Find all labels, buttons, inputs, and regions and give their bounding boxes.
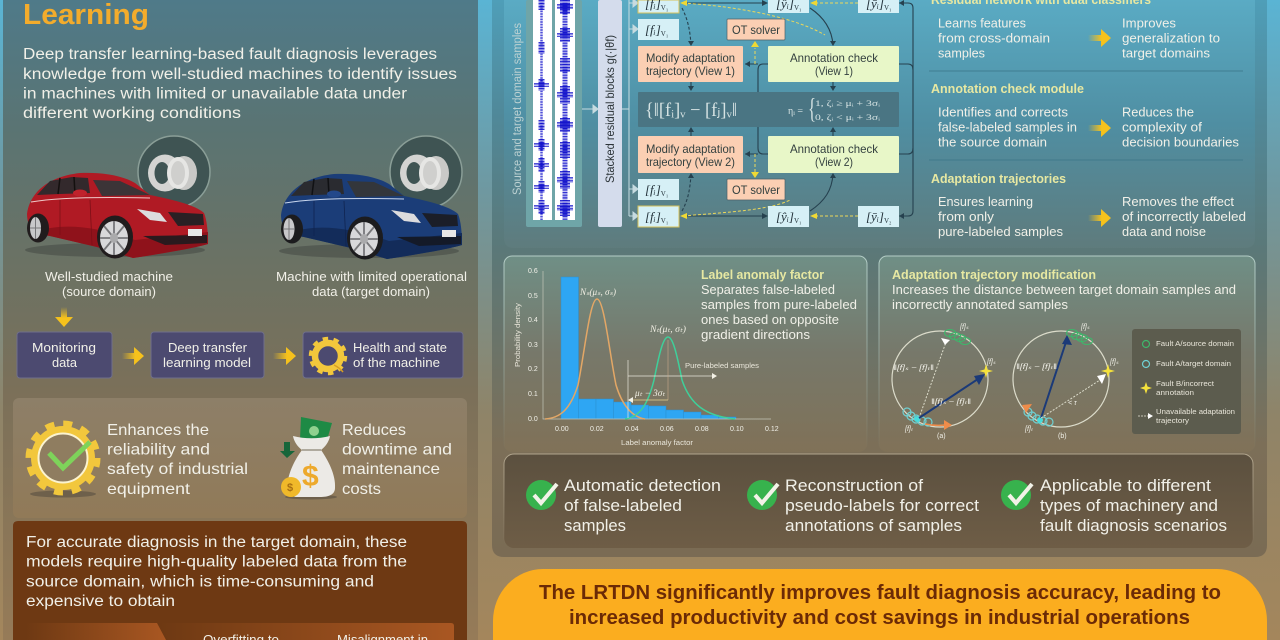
icon: red car: [25, 173, 208, 258]
formula band: 1, ζᵢ ≥ μᵢ + 3σᵢ: [815, 98, 881, 108]
text: reduces downtime: Reduces: [342, 422, 406, 439]
block: annotation check module: Reduces the: [1122, 104, 1194, 120]
feature: applicable: types of machinery and: [1040, 497, 1218, 515]
chart: probability density histogram: 0.10: [730, 426, 744, 433]
diagram: circle b: (b): [1058, 433, 1067, 440]
icon: gear with check: [30, 424, 96, 498]
conclusion banner: increased productivity and cost savings in industrial operations: [569, 607, 1190, 629]
box: deep transfer learning model: [151, 332, 264, 378]
text: labeled data requirement: expensive to obtain: [26, 593, 175, 610]
intro paragraph: in machines with limited or unavailable data under: [23, 86, 407, 102]
diagram: circle a: [892, 324, 996, 440]
feature: reconstruction: pseudo-labels for correct: [785, 497, 979, 515]
box: deep transfer learning model: Deep transfer: [168, 340, 248, 355]
formula band: {: [808, 94, 816, 125]
text: enhances reliability: [107, 422, 248, 498]
feature box labels: V₁: [661, 30, 668, 38]
box: health and state of the machine: of the machine: [353, 355, 440, 370]
feature: reconstruction: Reconstruction of: [785, 477, 923, 495]
feature box labels: V₁: [661, 217, 668, 225]
block: adaptation trajectories: Adaptation trajectories: [931, 171, 1066, 186]
feature box labels: [ŷᵢ]: [776, 209, 794, 224]
block: adaptation trajectories: of incorrectly labeled: [1122, 209, 1246, 224]
conclusion banner: The LRTDN significantly improves fault diagnosis accuracy, leading to: [539, 582, 1221, 604]
stacked residual blocks: Stacked residual blocks g(·|θf): [603, 35, 617, 183]
text: label anomaly factor: gradient directions: [701, 327, 811, 342]
annotation check boxes: [768, 46, 899, 173]
feature box labels: V₁: [661, 190, 668, 198]
feature box labels: V₁: [794, 4, 801, 12]
chart: probability density histogram: 0.02: [590, 426, 604, 433]
diagram: circle a: ‖[f]ₛ − [f]ₜ‖: [893, 365, 934, 372]
chart: probability density histogram: 0.3: [528, 342, 538, 349]
text: trajectory modification: incorrectly annotated samples: [892, 297, 1069, 312]
chart: probability density histogram: Pure-labeled samples: [685, 361, 759, 370]
feature box labels: [fᵢ]: [645, 209, 661, 224]
icon: gear: [311, 339, 345, 373]
icon: bearing on target machine: [390, 136, 462, 208]
block: adaptation trajectories: Removes the effect: [1122, 194, 1234, 209]
diagram: circle b: [1013, 324, 1119, 440]
feature box labels: V₂: [884, 217, 892, 225]
legend: Fault B/incorrect: [1156, 379, 1215, 388]
modify adaptation trajectory boxes: Modify adaptation: [646, 142, 735, 156]
yellow dashed connectors: [683, 3, 858, 216]
OT solver boxes: OT solver: [732, 23, 780, 37]
arrow: down to monitoring data: [55, 307, 73, 327]
annotation check boxes: Annotation check: [790, 142, 879, 156]
intro paragraph: different working conditions: [23, 105, 241, 122]
block: annotation check module: the source domain: [938, 134, 1047, 150]
chart: probability density histogram: Label anomaly factor: [621, 440, 694, 447]
OT solver boxes: [727, 19, 785, 200]
diagram: circle a: [f]ₜ: [904, 426, 914, 433]
intro paragraph: [23, 46, 457, 122]
diagram: circle a: [f]ₛ: [986, 359, 996, 366]
arrow: to health state: [273, 347, 296, 365]
feature: reconstruction: [747, 477, 979, 535]
right panel: LRTDN: [492, 0, 1267, 557]
source machine label: (source domain): [62, 285, 156, 299]
vertical label: samples: Source and target domain samples: [512, 23, 524, 195]
panel: data requirement: [13, 521, 467, 640]
signals: [526, 0, 582, 227]
text: label anomaly factor: Label anomaly factor: [701, 267, 824, 282]
source machine label: Well-studied machine: [45, 270, 173, 284]
target machine label: Machine with limited operational: [276, 270, 467, 284]
box: monitoring data: data: [52, 355, 78, 370]
block: adaptation trajectories: from only: [938, 209, 995, 224]
text: reduces downtime: costs: [342, 481, 381, 498]
chart: probability density histogram: 0.5: [528, 293, 538, 300]
feature: applicable: [1001, 477, 1227, 535]
annotation check boxes: (View 1): [815, 64, 853, 78]
text: enhances reliability: equipment: [107, 481, 191, 498]
block: annotation check module: Annotation check module: [931, 81, 1084, 96]
chart: probability density histogram: Probability density: [515, 302, 522, 367]
chart: probability density histogram: 0.00: [555, 426, 569, 433]
modify adaptation trajectory boxes: trajectory (View 1): [646, 64, 735, 78]
feature box labels: [fᵢ]: [645, 22, 661, 37]
chart: probability density histogram: 0.6: [528, 268, 538, 275]
box: monitoring data: Monitoring: [32, 340, 96, 355]
panel: benefits: [13, 398, 467, 518]
block: annotation check module: false-labeled samples in: [938, 120, 1077, 134]
box: health and state of the machine: Health and state: [353, 340, 447, 355]
feature: automatic detection: Automatic detection: [564, 477, 721, 495]
feature box labels: V₁: [794, 217, 801, 225]
chart: probability density histogram: 0.1: [528, 391, 538, 398]
diagram: circle a: ‖[f]ₛ − [f]ₜ‖: [931, 399, 971, 406]
legend: Unavailable adaptation: [1156, 407, 1235, 416]
legend: [1132, 329, 1241, 434]
diagram: network architecture: [512, 0, 913, 227]
block: annotation check module: complexity of: [1122, 120, 1202, 134]
intro paragraph: Deep transfer learning-based fault diagnosis leverages: [23, 46, 437, 63]
modify adaptation trajectory boxes: trajectory (View 2): [646, 155, 735, 169]
panel: adaptation trajectory modification: [879, 256, 1255, 452]
diagram: circle a: [f]ₛ: [959, 324, 969, 331]
chart: probability density histogram: 0.08: [695, 426, 709, 433]
block: residual network: Learns features: [938, 16, 1026, 30]
text: reduces downtime: [342, 422, 452, 498]
chart: probability density histogram: Nₛ(μₛ, σₛ): [579, 287, 616, 297]
icon: money bag: $: [287, 482, 293, 494]
icon: bearing on source machine: [138, 136, 210, 208]
block: residual network: samples: [938, 46, 985, 60]
diagram: circle b: ‖[f]ₛ − [f]ₜ‖: [1016, 364, 1057, 371]
block: residual network: generalization to: [1122, 30, 1220, 46]
icon: money bag: $: [302, 460, 319, 493]
formula band: {‖[fᵢ]ᵥ − [fⱼ]ᵥ‖: [645, 100, 737, 121]
chart: probability density histogram: [515, 268, 779, 447]
text: label anomaly factor: samples from pure-labeled: [701, 297, 857, 312]
feature: applicable: fault diagnosis scenarios: [1040, 517, 1227, 535]
block: annotation check module: Identifies and corrects: [938, 104, 1068, 120]
legend: Fault A/source domain: [1156, 339, 1234, 348]
yellow arrowheads: [680, 0, 817, 219]
text: label anomaly factor: Separates false-labeled: [701, 282, 835, 297]
left panel: problem context: [3, 0, 478, 640]
modify adaptation trajectory boxes: [638, 46, 743, 173]
block: residual network: from cross-domain: [938, 30, 1050, 46]
panel: label anomaly factor: [504, 256, 867, 452]
block: residual network: Improves: [1122, 16, 1176, 30]
text: label anomaly factor: ones based on opposite: [701, 312, 839, 327]
panel: key features: [504, 454, 1253, 548]
chart: probability density histogram: 0.12: [765, 426, 779, 433]
legend: trajectory: [1156, 416, 1189, 425]
text: labeled data requirement: models require high-quality labeled data from the: [26, 554, 407, 570]
chart: probability density histogram: 0.4: [528, 317, 538, 324]
target machine label: data (target domain): [312, 285, 430, 299]
modify adaptation trajectory boxes: Modify adaptation: [646, 51, 735, 65]
chart: probability density histogram: 0.2: [528, 366, 538, 373]
formula band: [638, 92, 899, 127]
legend: Fault A/target domain: [1156, 359, 1231, 368]
diagram: circle b: [f]ₛ: [1109, 359, 1119, 366]
target machine label: [276, 270, 467, 299]
text: labeled data requirement: [26, 534, 407, 610]
chart: probability density histogram: Nₜ(μₜ, σₜ): [649, 324, 686, 334]
block: adaptation trajectories: Ensures learning: [938, 194, 1033, 209]
chart: probability density histogram: 0.04: [625, 426, 639, 433]
block: annotation check module: decision boundaries: [1122, 134, 1240, 150]
feature boxes: [638, 0, 899, 227]
band: challenges: [26, 623, 454, 640]
feature: automatic detection: of false-labeled: [564, 497, 682, 515]
block: adaptation trajectories: data and noise: [1122, 224, 1206, 239]
text: labeled data requirement: For accurate diagnosis in the target domain, these: [26, 534, 407, 551]
icon: blue car: [279, 174, 462, 260]
diagram: circle b: [f]ₜ: [1024, 426, 1034, 433]
text: reduces downtime: maintenance: [342, 461, 440, 478]
feature: automatic detection: [526, 477, 721, 535]
feature: applicable: Applicable to different: [1040, 477, 1211, 495]
block: residual network: target domains: [1122, 46, 1211, 60]
icon: money bag: [280, 417, 337, 500]
text: label anomaly factor: [701, 267, 857, 342]
input connectors: [582, 0, 638, 220]
feature box labels: V₁: [661, 4, 668, 12]
diagram: circle b: < τ: [1068, 400, 1077, 407]
formula band: ηᵢ =: [788, 106, 803, 117]
chart: probability density histogram: μₜ − 3σₜ: [634, 388, 665, 398]
block: annotation check module: [931, 81, 1240, 150]
feature box labels: [ȳᵢ]: [866, 209, 884, 224]
source machine label: [45, 270, 173, 299]
text: trajectory modification: [892, 267, 1236, 312]
block: adaptation trajectories: pure-labeled samples: [938, 224, 1063, 239]
stacked residual blocks: [598, 0, 622, 227]
annotation check boxes: (View 2): [815, 155, 853, 169]
flow arrowheads: [688, 0, 904, 219]
feature box labels: V₁: [884, 4, 891, 12]
box: deep transfer learning model: learning model: [163, 355, 251, 370]
text: labeled data requirement: source domain, which is time-consuming and: [26, 574, 374, 590]
flow connectors: [682, 3, 913, 216]
text: trajectory modification: Adaptation trajectory modification: [892, 267, 1096, 282]
feature box labels: [645, 0, 892, 225]
feature: automatic detection: samples: [564, 517, 626, 535]
intro paragraph: knowledge from well-studied machines to identify issues: [23, 66, 457, 83]
text: enhances reliability: reliability and: [107, 442, 210, 458]
arrow: to model: [122, 347, 144, 365]
feature box labels: [fᵢ]: [645, 182, 661, 197]
feature: reconstruction: annotations of samples: [785, 517, 962, 535]
box: health and state of the machine: [303, 332, 463, 378]
text: enhances reliability: safety of industrial: [107, 461, 248, 478]
chart: probability density histogram: 0.06: [660, 426, 674, 433]
formula band: 0, ζᵢ < μᵢ + 3σᵢ: [815, 112, 881, 122]
text: trajectory modification: Increases the distance between target domain samples and: [892, 282, 1236, 297]
diagram: circle b: [f]ₛ: [1080, 324, 1090, 331]
block: adaptation trajectories: [931, 171, 1246, 239]
text: reduces downtime: downtime and: [342, 442, 452, 458]
conclusion banner: [493, 569, 1267, 640]
text: enhances reliability: Enhances the: [107, 422, 209, 439]
chart: probability density histogram: 0.0: [528, 416, 538, 423]
diagram: circle a: (a): [937, 433, 946, 440]
OT solver boxes: OT solver: [732, 183, 780, 197]
box: monitoring data: [17, 332, 112, 378]
annotation check boxes: Annotation check: [790, 51, 879, 65]
legend: annotation: [1156, 388, 1194, 397]
block: residual network: [931, 0, 1220, 60]
